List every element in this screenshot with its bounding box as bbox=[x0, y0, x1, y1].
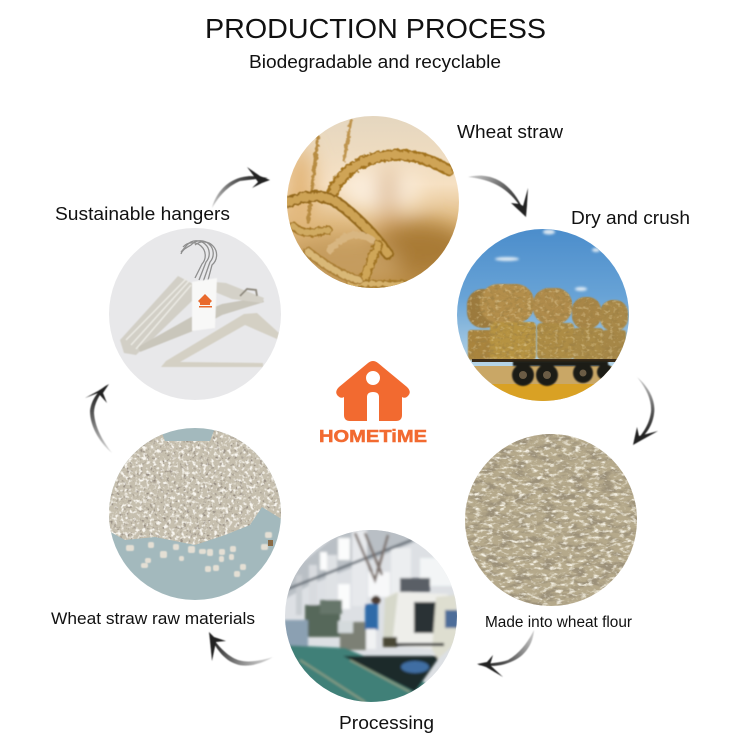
arrow: dry and crush to wheat flour bbox=[633, 377, 658, 445]
tag card bbox=[192, 278, 217, 331]
photo: sustainable hangers bbox=[107, 226, 283, 402]
hanger hooks bbox=[181, 241, 217, 284]
CNC machine bbox=[392, 590, 446, 648]
worker bbox=[365, 604, 378, 630]
wordmark: HOMETiME bbox=[319, 426, 427, 446]
bales bbox=[467, 284, 628, 360]
logo: Hometime bbox=[319, 361, 427, 446]
label: wheat straw raw materials: Wheat straw raw materials bbox=[51, 609, 255, 628]
subtitle: Biodegradable and recyclable bbox=[249, 52, 501, 72]
front hanger bbox=[161, 313, 279, 367]
arrow: processing to raw materials bbox=[209, 632, 273, 666]
ceiling and columns bbox=[287, 530, 416, 598]
ground bbox=[474, 366, 612, 401]
label: wheat straw: Wheat straw bbox=[457, 121, 564, 142]
hanger stack bbox=[120, 276, 279, 367]
label: dry and crush: Dry and crush bbox=[571, 207, 690, 228]
icon: orange house bbox=[336, 361, 410, 421]
arrow: wheat straw to dry and crush bbox=[468, 176, 528, 217]
photo: crushed wheat straw bbox=[463, 432, 639, 608]
arrow: raw materials to hangers bbox=[85, 384, 112, 453]
label: made into wheat flour: Made into wheat flour bbox=[485, 614, 632, 631]
floor bbox=[290, 644, 426, 702]
photo: wheat ears bbox=[285, 114, 470, 290]
scattered pellets bbox=[126, 532, 272, 577]
label: processing: Processing bbox=[339, 712, 434, 733]
arrow: wheat flour to processing bbox=[477, 630, 534, 677]
milling machines bbox=[305, 605, 340, 637]
label: sustainable hangers: Sustainable hangers bbox=[55, 203, 230, 224]
photo: hay bales on trailer bbox=[455, 226, 631, 406]
arrow: hangers to wheat straw bbox=[212, 167, 270, 208]
photo: processing factory bbox=[283, 528, 460, 704]
clouds bbox=[495, 230, 600, 291]
trailer and wheels bbox=[472, 359, 622, 362]
tag logo bbox=[198, 294, 212, 308]
photo: wheat straw raw material pellets bbox=[107, 426, 283, 602]
title: PRODUCTION PROCESS bbox=[205, 13, 546, 44]
